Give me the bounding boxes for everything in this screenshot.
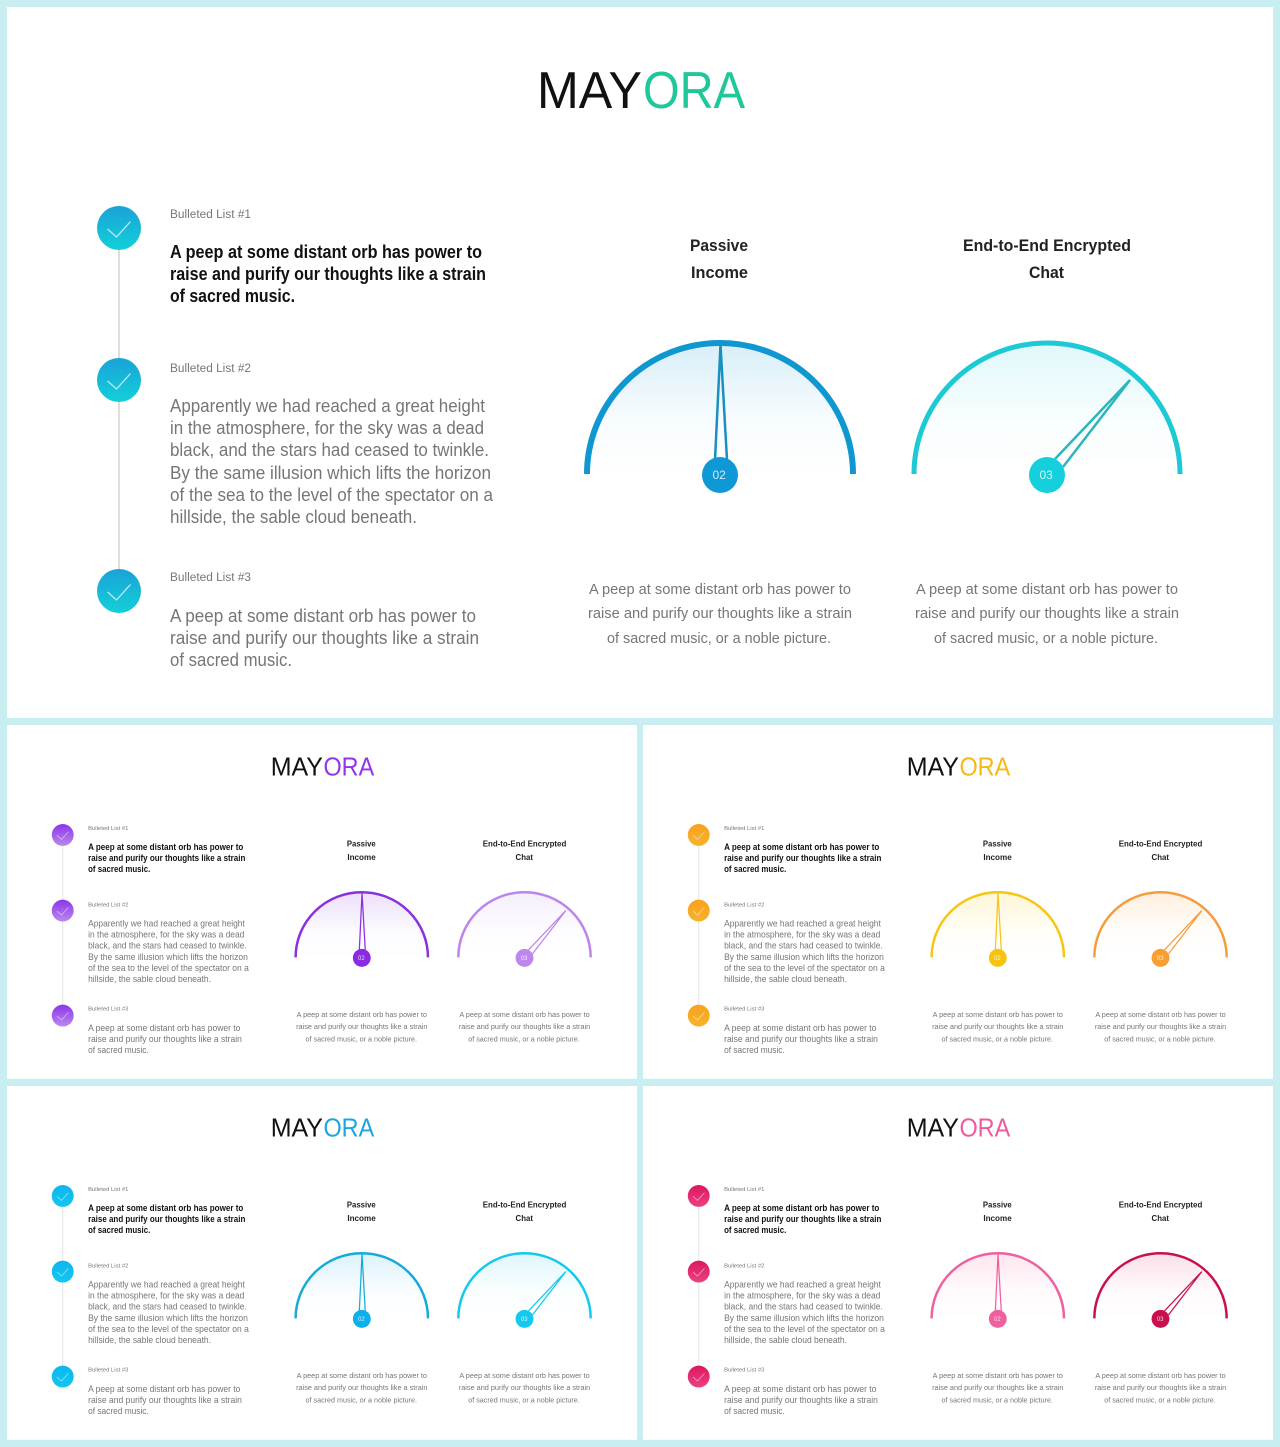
bulleted list 1: of sacred music.	[88, 864, 150, 874]
panel: pink slide	[643, 1086, 1273, 1440]
title	[271, 1114, 375, 1142]
title	[537, 62, 745, 120]
bulleted list 2: hillside, the sable cloud beneath.	[88, 974, 211, 984]
bulleted list 2: of the sea to the level of the spectator on a	[724, 1324, 885, 1334]
caption right: raise and purify our thoughts like a strain	[459, 1022, 590, 1031]
bulleted list 1: raise and purify our thoughts like a strain	[724, 1214, 881, 1224]
caption right: A peep at some distant orb has power to	[459, 1371, 590, 1380]
caption right	[1095, 1010, 1226, 1043]
bulleted list 1: raise and purify our thoughts like a strain	[88, 1214, 245, 1224]
bulleted list 3	[724, 1007, 878, 1055]
title: MAY	[907, 753, 959, 781]
title: ORA	[959, 1114, 1011, 1142]
bulleted list 3: of sacred music.	[88, 1045, 149, 1055]
title: ORA	[643, 62, 745, 120]
heading: encrypted chat: End-to-End Encrypted	[483, 838, 566, 848]
bulleted list 2: Bulleted List #2	[170, 363, 251, 375]
title: ORA	[323, 1114, 375, 1142]
bulleted list 1: A peep at some distant orb has power to	[724, 1203, 880, 1213]
heading: passive income: Passive	[347, 1199, 376, 1209]
bulleted list 1: A peep at some distant orb has power to	[170, 242, 482, 262]
title: MAY	[271, 753, 323, 781]
gauge: passive income 02: 02	[712, 468, 726, 482]
bulleted list 2: By the same illusion which lifts the horizon	[170, 463, 491, 483]
bulleted list 2	[170, 363, 494, 527]
caption right	[459, 1010, 590, 1043]
gauge: passive income 02	[296, 1253, 428, 1328]
caption left: A peep at some distant orb has power to	[297, 1010, 427, 1019]
bulleted list 2: Apparently we had reached a great height	[724, 1280, 881, 1290]
bulleted list 3: raise and purify our thoughts like a strain	[724, 1034, 878, 1044]
timeline with check icons	[97, 206, 141, 613]
title: ORA	[323, 753, 375, 781]
caption left: of sacred music, or a noble picture.	[306, 1034, 417, 1043]
bulleted list 2: in the atmosphere, for the sky was a dead	[170, 418, 484, 438]
caption left: of sacred music, or a noble picture.	[942, 1034, 1053, 1043]
bulleted list 2: Bulleted List #2	[88, 1264, 128, 1270]
title	[907, 1114, 1011, 1142]
bulleted list 3: of sacred music.	[170, 650, 292, 670]
gauge: passive income 02: 02	[994, 1317, 1001, 1323]
bulleted list 2: Apparently we had reached a great height	[88, 1280, 245, 1290]
heading: encrypted chat	[1119, 838, 1202, 862]
heading: encrypted chat: End-to-End Encrypted	[483, 1199, 566, 1209]
heading: passive income	[690, 236, 748, 282]
bulleted list 3: raise and purify our thoughts like a strain	[88, 1395, 242, 1405]
bulleted list 3: raise and purify our thoughts like a strain	[170, 628, 479, 648]
gauge: encrypted chat 03	[458, 892, 591, 967]
bulleted list 2: black, and the stars had ceased to twinkle.	[88, 1301, 247, 1311]
heading: encrypted chat: Chat	[516, 852, 533, 862]
title: MAY	[537, 62, 642, 120]
heading: encrypted chat: Chat	[1029, 263, 1064, 282]
caption right: raise and purify our thoughts like a strain	[1095, 1022, 1226, 1031]
gauge: passive income 02	[296, 892, 428, 967]
bulleted list 1	[88, 826, 245, 874]
caption left: raise and purify our thoughts like a strain	[296, 1383, 427, 1392]
caption left	[296, 1371, 427, 1404]
bulleted list 2: By the same illusion which lifts the horizon	[88, 952, 248, 962]
bulleted list 2: in the atmosphere, for the sky was a dead	[88, 1290, 244, 1300]
bulleted list 2: in the atmosphere, for the sky was a dead	[88, 929, 244, 939]
gauge: passive income 02	[587, 343, 853, 493]
title: ORA	[959, 753, 1011, 781]
bulleted list 2: of the sea to the level of the spectator on a	[88, 963, 249, 973]
heading: encrypted chat: End-to-End Encrypted	[1119, 838, 1202, 848]
bulleted list 2: of the sea to the level of the spectator on a	[88, 1324, 249, 1334]
bulleted list 2	[88, 903, 249, 984]
bulleted list 1: raise and purify our thoughts like a strain	[88, 853, 245, 863]
caption right: raise and purify our thoughts like a strain	[459, 1383, 590, 1392]
caption left: raise and purify our thoughts like a strain	[932, 1022, 1063, 1031]
bulleted list 3: of sacred music.	[724, 1406, 785, 1416]
title: MAY	[271, 1114, 323, 1142]
caption left	[588, 582, 852, 647]
gauge: encrypted chat 03: 03	[521, 1317, 528, 1323]
timeline with check icons	[52, 824, 74, 1027]
bulleted list 3: Bulleted List #3	[170, 572, 251, 584]
heading: encrypted chat	[483, 1199, 566, 1223]
bulleted list 1: of sacred music.	[88, 1225, 150, 1235]
bulleted list 3: A peep at some distant orb has power to	[88, 1384, 240, 1394]
bulleted list 3: A peep at some distant orb has power to	[170, 606, 476, 626]
gauge: encrypted chat 03: 03	[1157, 1317, 1164, 1323]
bulleted list 1: Bulleted List #1	[88, 826, 128, 832]
bulleted list 1	[170, 209, 486, 306]
bulleted list 3	[88, 1368, 242, 1416]
gauge: passive income 02: 02	[358, 1317, 365, 1323]
caption left: raise and purify our thoughts like a strain	[588, 606, 852, 622]
caption left: A peep at some distant orb has power to	[297, 1371, 427, 1380]
gauge: encrypted chat 03: 03	[521, 956, 528, 962]
gauge: encrypted chat 03: 03	[1157, 956, 1164, 962]
bulleted list 1: raise and purify our thoughts like a strain	[170, 264, 486, 284]
caption left: raise and purify our thoughts like a strain	[932, 1383, 1063, 1392]
bulleted list 2	[724, 903, 885, 984]
bulleted list 3: Bulleted List #3	[724, 1368, 764, 1374]
bulleted list 1: A peep at some distant orb has power to	[88, 1203, 244, 1213]
bulleted list 3: of sacred music.	[88, 1406, 149, 1416]
gauge: encrypted chat 03	[1094, 1253, 1227, 1328]
bulleted list 3	[170, 572, 479, 670]
bulleted list 3: A peep at some distant orb has power to	[724, 1023, 876, 1033]
bulleted list 3: raise and purify our thoughts like a strain	[724, 1395, 878, 1405]
bulleted list 3: A peep at some distant orb has power to	[88, 1023, 240, 1033]
bulleted list 2: Apparently we had reached a great height	[170, 396, 485, 416]
heading: passive income: Passive	[983, 838, 1012, 848]
bulleted list 3: Bulleted List #3	[88, 1007, 128, 1013]
heading: encrypted chat: Chat	[516, 1213, 533, 1223]
title: MAY	[907, 1114, 959, 1142]
bulleted list 1: Bulleted List #1	[88, 1187, 128, 1193]
title	[907, 753, 1011, 781]
bulleted list 2: black, and the stars had ceased to twinkle.	[724, 1301, 883, 1311]
caption right: of sacred music, or a noble picture.	[1104, 1395, 1216, 1404]
heading: passive income: Passive	[347, 838, 376, 848]
heading: encrypted chat	[963, 236, 1131, 282]
caption left: A peep at some distant orb has power to	[589, 582, 851, 598]
caption right	[459, 1371, 590, 1404]
caption left: of sacred music, or a noble picture.	[942, 1395, 1053, 1404]
gauge: encrypted chat 03	[458, 1253, 591, 1328]
bulleted list 2: By the same illusion which lifts the horizon	[724, 952, 884, 962]
bulleted list 3: Bulleted List #3	[88, 1368, 128, 1374]
caption right: A peep at some distant orb has power to	[459, 1010, 590, 1019]
bulleted list 3: Bulleted List #3	[724, 1007, 764, 1013]
caption left: A peep at some distant orb has power to	[933, 1371, 1063, 1380]
caption right	[1095, 1371, 1226, 1404]
caption left	[932, 1010, 1063, 1043]
bulleted list 1: raise and purify our thoughts like a strain	[724, 853, 881, 863]
bulleted list 1	[724, 1187, 881, 1235]
bulleted list 3	[724, 1368, 878, 1416]
bulleted list 3: of sacred music.	[724, 1045, 785, 1055]
panel: purple slide	[7, 725, 637, 1079]
caption left	[932, 1371, 1063, 1404]
bulleted list 3	[88, 1007, 242, 1055]
bulleted list 2: By the same illusion which lifts the horizon	[724, 1313, 884, 1323]
caption left: A peep at some distant orb has power to	[933, 1010, 1063, 1019]
bulleted list 1: of sacred music.	[724, 1225, 786, 1235]
caption right: of sacred music, or a noble picture.	[468, 1034, 580, 1043]
caption right: raise and purify our thoughts like a strain	[915, 606, 1179, 622]
heading: passive income	[347, 838, 376, 862]
heading: passive income: Income	[691, 263, 748, 282]
bulleted list 2: in the atmosphere, for the sky was a dead	[724, 1290, 880, 1300]
panel: blue slide	[7, 1086, 637, 1440]
bulleted list 2: of the sea to the level of the spectator on a	[170, 485, 494, 505]
bulleted list 2: of the sea to the level of the spectator on a	[724, 963, 885, 973]
caption right	[915, 582, 1179, 647]
heading: passive income: Income	[983, 852, 1012, 862]
gauge: passive income 02	[932, 892, 1064, 967]
heading: passive income: Passive	[983, 1199, 1012, 1209]
bulleted list 1: of sacred music.	[724, 864, 786, 874]
bulleted list 2: hillside, the sable cloud beneath.	[724, 1335, 847, 1345]
heading: passive income: Income	[347, 852, 376, 862]
timeline with check icons	[688, 824, 710, 1027]
bulleted list 1: of sacred music.	[170, 286, 295, 306]
bulleted list 2	[88, 1264, 249, 1345]
gauge: passive income 02	[932, 1253, 1064, 1328]
gauge: encrypted chat 03	[914, 343, 1180, 493]
bulleted list 2: black, and the stars had ceased to twinkle.	[724, 940, 883, 950]
heading: encrypted chat: Chat	[1152, 852, 1169, 862]
bulleted list 2: Apparently we had reached a great height	[88, 919, 245, 929]
panel: orange slide	[643, 725, 1273, 1079]
bulleted list 2: in the atmosphere, for the sky was a dead	[724, 929, 880, 939]
timeline with check icons	[52, 1185, 74, 1388]
bulleted list 2: Apparently we had reached a great height	[724, 919, 881, 929]
caption right: A peep at some distant orb has power to	[1095, 1010, 1226, 1019]
heading: encrypted chat	[1119, 1199, 1202, 1223]
heading: passive income: Passive	[690, 236, 748, 255]
bulleted list 1	[88, 1187, 245, 1235]
bulleted list 2: black, and the stars had ceased to twinkle.	[88, 940, 247, 950]
heading: passive income	[347, 1199, 376, 1223]
heading: passive income: Income	[347, 1213, 376, 1223]
gauge: passive income 02: 02	[994, 956, 1001, 962]
bulleted list 2: black, and the stars had ceased to twinkle.	[170, 440, 489, 460]
bulleted list 1: A peep at some distant orb has power to	[724, 842, 880, 852]
bulleted list 1: Bulleted List #1	[724, 826, 764, 832]
bulleted list 2: hillside, the sable cloud beneath.	[88, 1335, 211, 1345]
caption right: of sacred music, or a noble picture.	[934, 631, 1158, 647]
heading: passive income	[983, 838, 1012, 862]
timeline with check icons	[688, 1185, 710, 1388]
panel: main teal slide	[7, 7, 1273, 718]
heading: encrypted chat: End-to-End Encrypted	[963, 236, 1131, 255]
caption right: of sacred music, or a noble picture.	[468, 1395, 580, 1404]
bulleted list 2: Bulleted List #2	[724, 903, 764, 909]
bulleted list 1: Bulleted List #1	[724, 1187, 764, 1193]
caption left: of sacred music, or a noble picture.	[306, 1395, 417, 1404]
caption left: of sacred music, or a noble picture.	[607, 631, 831, 647]
bulleted list 3: A peep at some distant orb has power to	[724, 1384, 876, 1394]
bulleted list 2	[724, 1264, 885, 1345]
heading: encrypted chat: Chat	[1152, 1213, 1169, 1223]
bulleted list 2: hillside, the sable cloud beneath.	[170, 507, 417, 527]
heading: encrypted chat: End-to-End Encrypted	[1119, 1199, 1202, 1209]
bulleted list 2: hillside, the sable cloud beneath.	[724, 974, 847, 984]
heading: passive income: Income	[983, 1213, 1012, 1223]
gauge: passive income 02: 02	[358, 956, 365, 962]
bulleted list 2: Bulleted List #2	[724, 1264, 764, 1270]
caption right: of sacred music, or a noble picture.	[1104, 1034, 1216, 1043]
bulleted list 2: By the same illusion which lifts the horizon	[88, 1313, 248, 1323]
heading: encrypted chat	[483, 838, 566, 862]
bulleted list 1: Bulleted List #1	[170, 209, 251, 221]
bulleted list 3: raise and purify our thoughts like a strain	[88, 1034, 242, 1044]
caption right: A peep at some distant orb has power to	[916, 582, 1178, 598]
bulleted list 1: A peep at some distant orb has power to	[88, 842, 244, 852]
bulleted list 2: Bulleted List #2	[88, 903, 128, 909]
caption left	[296, 1010, 427, 1043]
caption right: A peep at some distant orb has power to	[1095, 1371, 1226, 1380]
gauge: encrypted chat 03	[1094, 892, 1227, 967]
title	[271, 753, 375, 781]
caption left: raise and purify our thoughts like a strain	[296, 1022, 427, 1031]
gauge: encrypted chat 03: 03	[1040, 468, 1053, 482]
caption right: raise and purify our thoughts like a strain	[1095, 1383, 1226, 1392]
heading: passive income	[983, 1199, 1012, 1223]
bulleted list 1	[724, 826, 881, 874]
